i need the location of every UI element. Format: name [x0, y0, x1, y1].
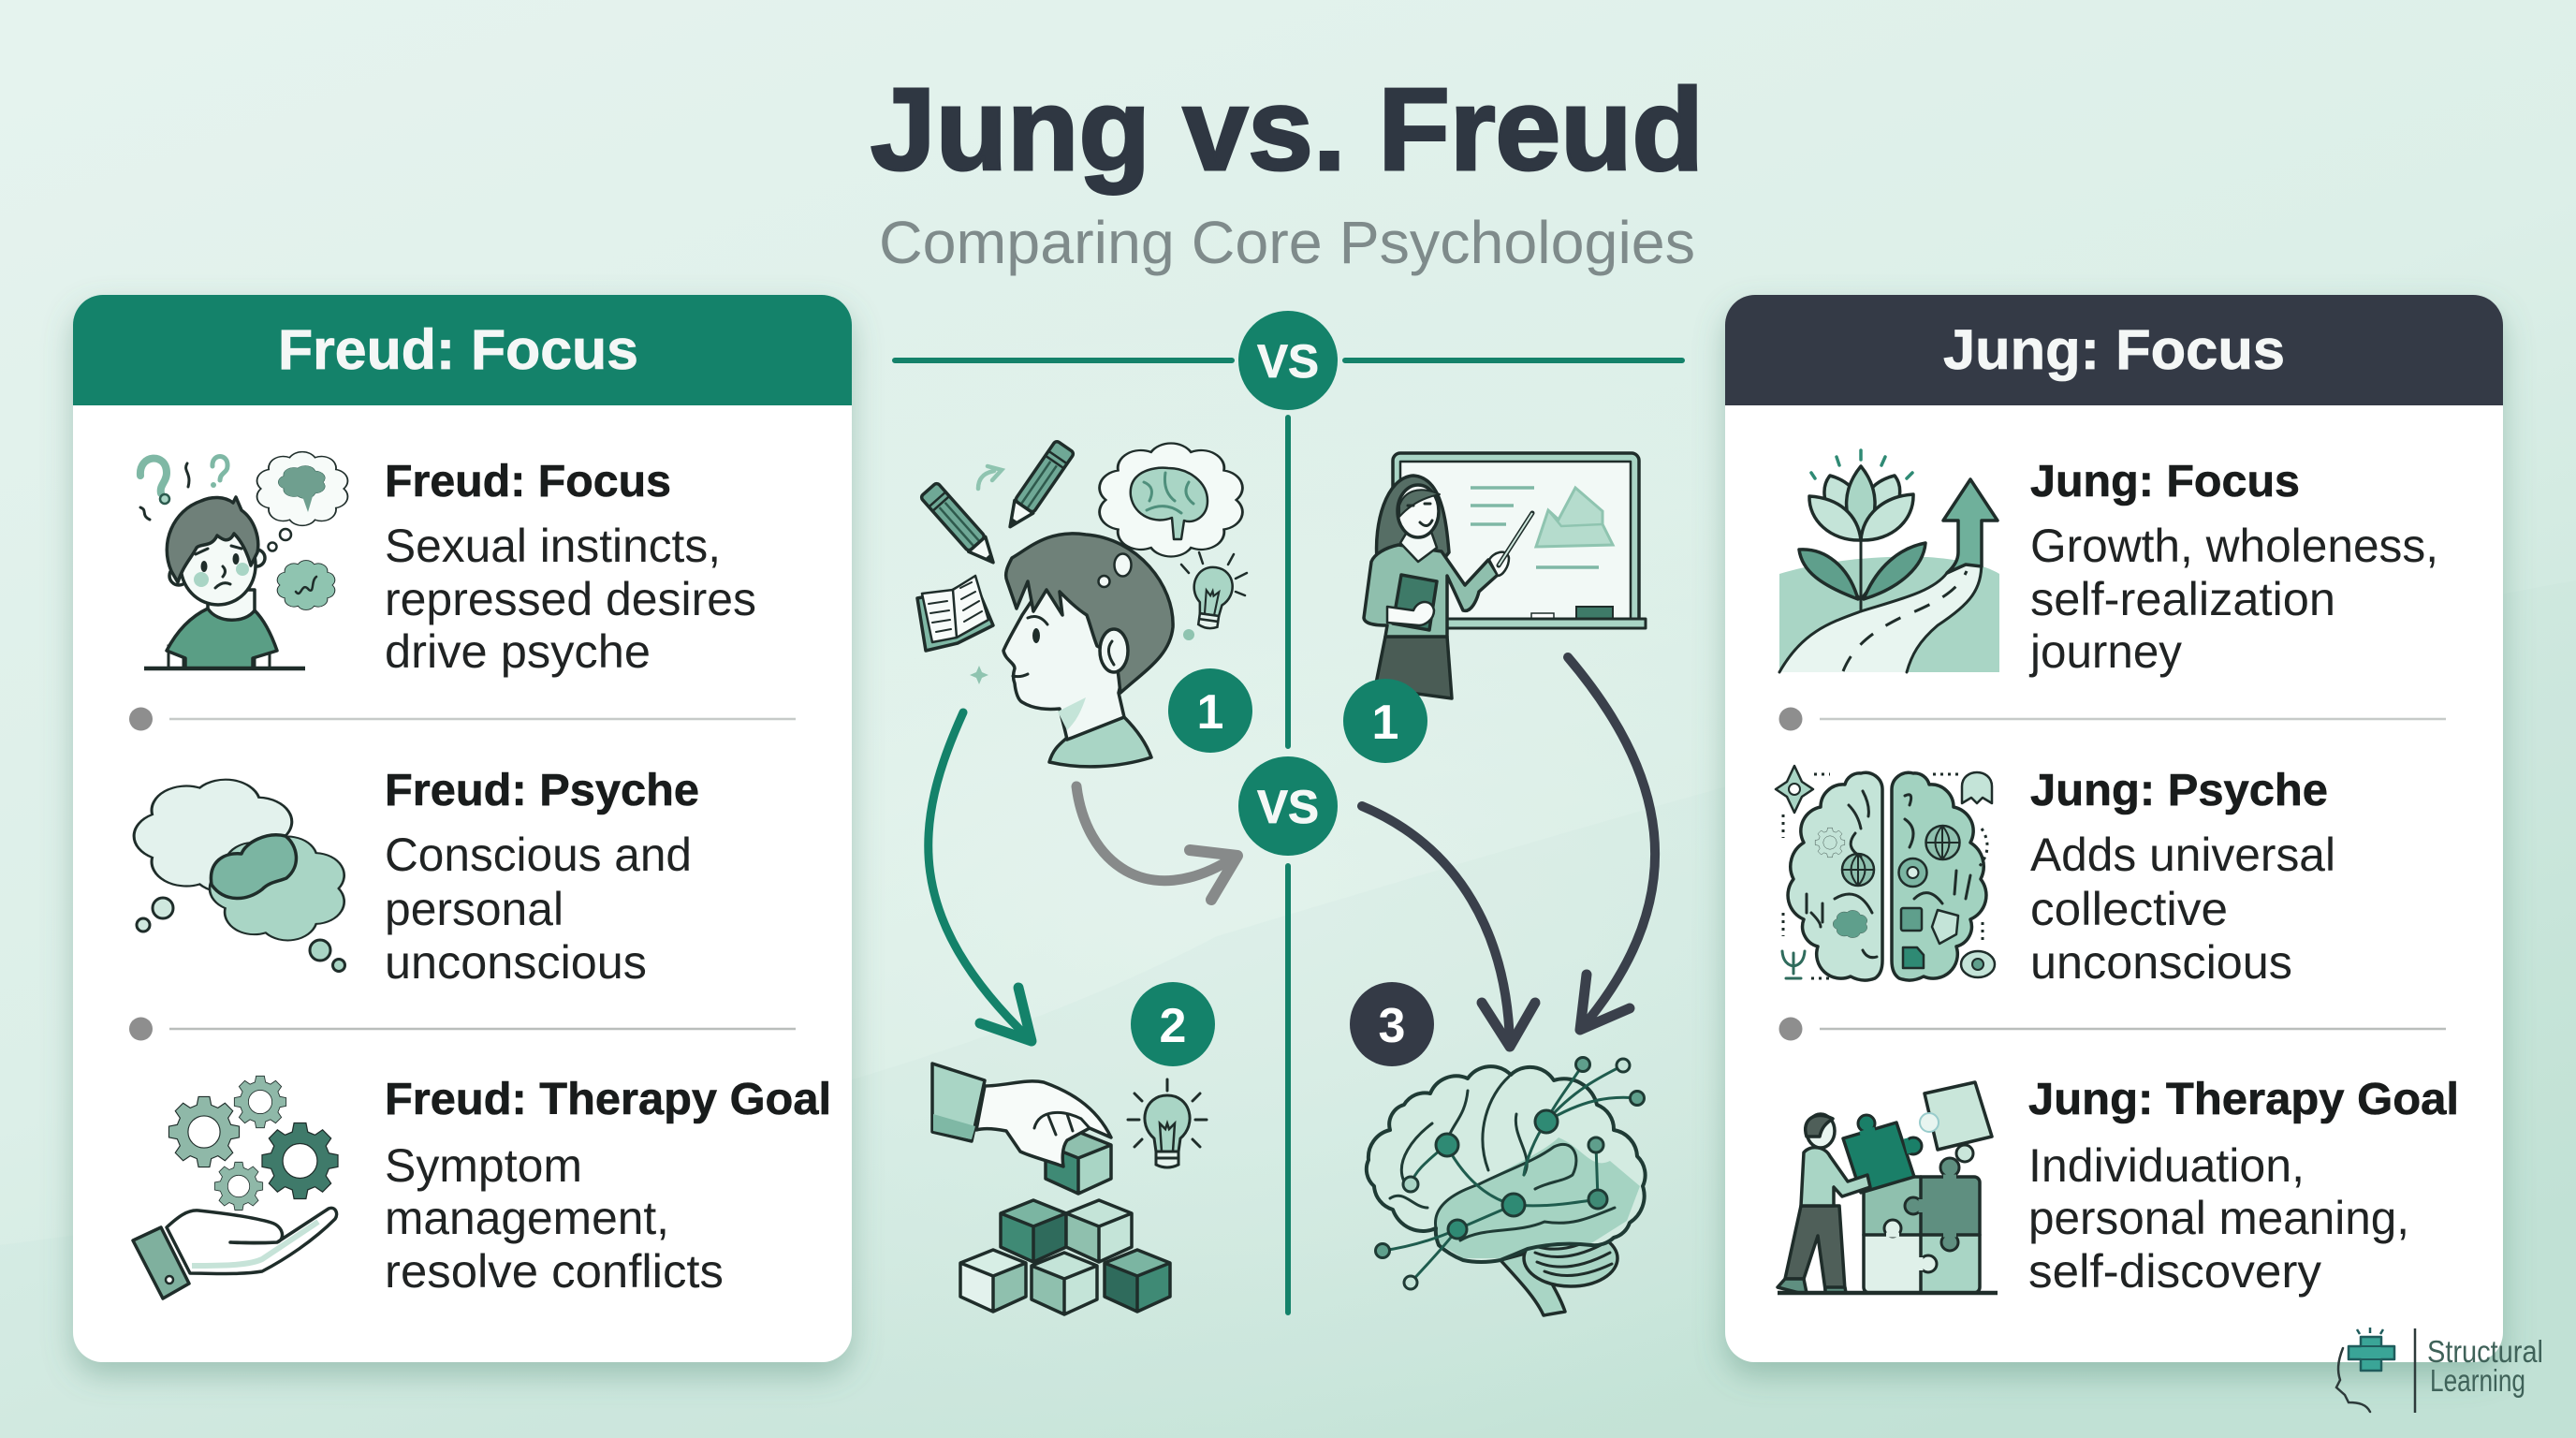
text: Jung psyche: unconscious — [2030, 936, 2292, 989]
text: Freud psyche: Conscious and — [385, 829, 692, 881]
panel header: Jung Focus: Jung: Focus — [1943, 318, 2285, 381]
text: Freud focus: drive psyche — [385, 625, 651, 678]
icon: overlapping thought clouds — [134, 780, 344, 972]
number badge: 1 left — [1168, 668, 1252, 753]
text: Jung focus — [2028, 457, 2438, 678]
text: Freud therapy goal: Symptom — [385, 1139, 582, 1192]
logo: Structural Learning — [2336, 1328, 2543, 1413]
text: Jung therapy goal: self-discovery — [2028, 1245, 2321, 1298]
icon: person assembling puzzle — [1778, 1082, 1998, 1293]
arrow: dark VS to brain — [1362, 806, 1535, 1047]
subtitle: Comparing Core Psychologies — [879, 209, 1695, 276]
icon: confused boy with thoughts — [140, 452, 347, 668]
number badge: 1 right — [1343, 679, 1427, 763]
text: Jung psyche — [2030, 766, 2335, 989]
logo: Structural Learning: Learning — [2430, 1363, 2525, 1398]
icon: lotus, path and rising arrow — [1779, 450, 1999, 672]
illustration: networked brain — [1367, 1058, 1646, 1315]
panel header: Freud Focus — [73, 295, 852, 405]
number badge: 3: 3 — [1379, 999, 1405, 1053]
logo: Structural Learning: Structural — [2427, 1334, 2543, 1369]
illustration: teacher at whiteboard — [1364, 453, 1646, 698]
text: Jung therapy goal: Jung: Therapy Goal — [2028, 1075, 2459, 1124]
text: Freud therapy goal — [385, 1075, 831, 1298]
badge: top VS: VS — [1257, 335, 1319, 388]
centre axis lines — [895, 360, 1682, 1313]
text: Freud psyche: unconscious — [385, 936, 647, 989]
arrow: dark teacher to brain — [1568, 657, 1655, 1030]
number badge: 2 — [1131, 982, 1215, 1066]
text: Freud therapy goal: management, — [385, 1192, 669, 1244]
text: Jung psyche: collective — [2030, 883, 2228, 935]
number badge: 1 right: 1 — [1372, 696, 1398, 750]
arrow: grey boy to VS — [1076, 786, 1237, 900]
text: Jung therapy goal: personal meaning, — [2028, 1192, 2409, 1244]
panel: Jung — [1725, 295, 2503, 1362]
text: Jung focus: journey — [2028, 625, 2182, 678]
panel: Freud — [73, 295, 852, 1362]
title: Jung vs. Freud — [871, 66, 1704, 195]
icon: gears above open hand — [133, 1076, 338, 1299]
text: Jung focus: self-realization — [2030, 573, 2335, 625]
text: Freud psyche: Freud: Psyche — [385, 766, 699, 815]
icon: divided brain with archetype symbols — [1776, 766, 1995, 980]
text: Jung focus: Jung: Focus — [2030, 457, 2300, 506]
text: Freud therapy goal: Freud: Therapy Goal — [385, 1075, 831, 1124]
text: Jung psyche: Jung: Psyche — [2030, 766, 2328, 815]
illustration: boy with ideas — [917, 440, 1247, 767]
text: Freud psyche — [385, 766, 699, 989]
text: Freud focus: Sexual instincts, — [385, 520, 721, 572]
badge: top VS — [1238, 311, 1338, 410]
text: Jung focus: Growth, wholeness, — [2030, 520, 2438, 572]
text: Freud focus: Freud: Focus — [385, 457, 671, 506]
number badge: 1 left: 1 — [1197, 685, 1223, 740]
illustration: hand stacking blocks — [932, 1064, 1207, 1314]
text: Jung psyche: Adds universal — [2030, 829, 2335, 881]
text: Jung therapy goal — [2028, 1075, 2459, 1298]
text: Freud psyche: personal — [385, 883, 564, 935]
text: Jung therapy goal: Individuation, — [2028, 1139, 2305, 1192]
panel header: Freud Focus: Freud: Focus — [278, 318, 638, 381]
number badge: 3 — [1350, 982, 1434, 1066]
text: Freud focus — [385, 457, 756, 678]
text: Freud therapy goal: resolve conflicts — [385, 1245, 724, 1298]
badge: middle VS: VS — [1257, 781, 1319, 833]
arrow: green boy to blocks — [929, 712, 1032, 1041]
text: Freud focus: repressed desires — [385, 573, 756, 625]
badge: middle VS — [1238, 756, 1338, 856]
number badge: 2: 2 — [1160, 999, 1186, 1053]
panel header: Jung Focus — [1725, 295, 2503, 405]
